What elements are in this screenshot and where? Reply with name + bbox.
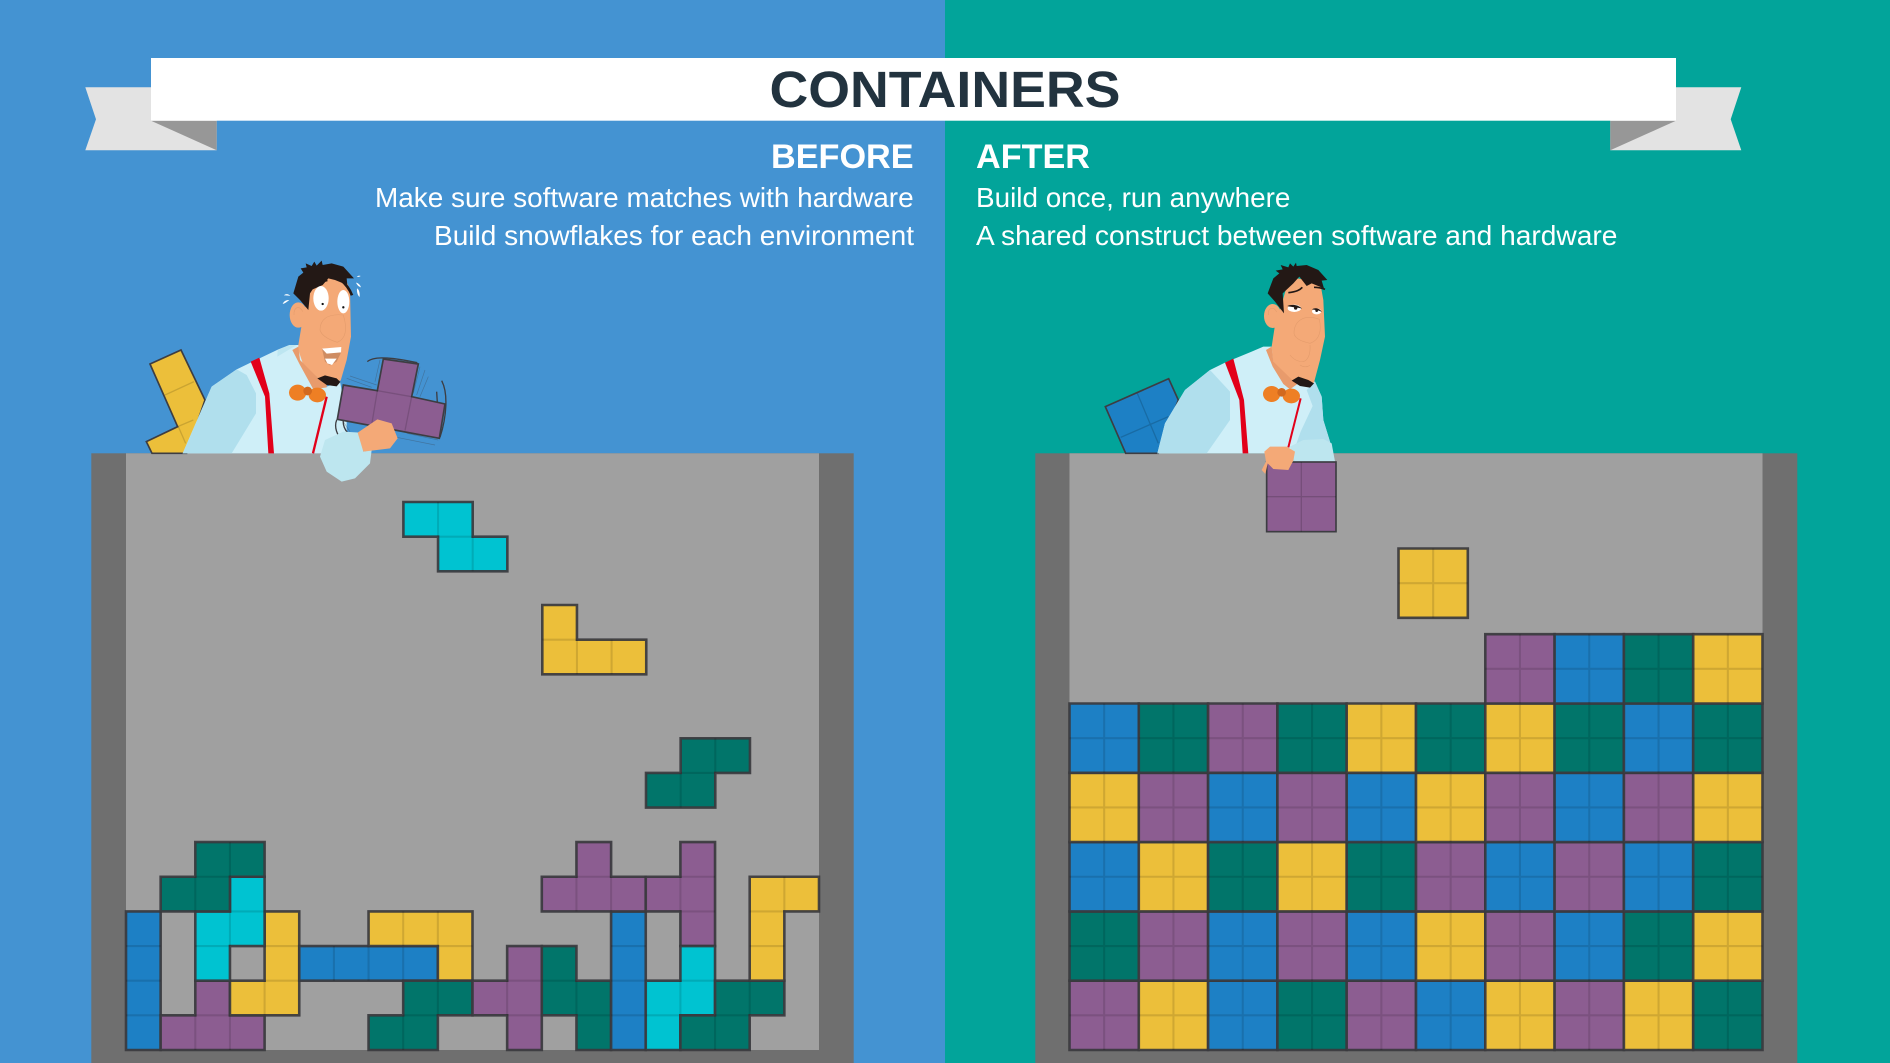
falling piece: yellow L: [542, 605, 646, 674]
piece: yellow L right: [750, 877, 819, 981]
heading: before: BEFORE: [771, 138, 914, 176]
falling piece: cyan Z: [403, 502, 507, 571]
face and neck: [1272, 278, 1325, 385]
piece: purple T top: [542, 842, 646, 911]
piece: yellow J: [230, 911, 299, 1015]
bow tie: [1263, 386, 1300, 403]
neck shadow: [292, 347, 327, 389]
before line 2: Build snowflakes for each environment: [434, 220, 914, 251]
piece: blue I right: [611, 911, 646, 1050]
after container: [1035, 453, 1797, 1063]
yellow block behind shoulder: [146, 350, 205, 453]
piece: blue I left: [126, 911, 161, 1050]
purple square held by hand: [1267, 462, 1336, 532]
piece: yellow L horizontal: [369, 911, 472, 981]
purple T block being shaken: [337, 359, 445, 438]
face and neck: [298, 273, 351, 382]
panel: before background: [0, 0, 945, 1063]
nose line: [320, 315, 346, 342]
shirt shadow: [183, 369, 256, 453]
ear: [290, 302, 307, 328]
piece: green vertical S: [542, 946, 611, 1050]
sweat drops: [283, 276, 361, 304]
before container: [91, 453, 854, 1063]
right eye: [1312, 308, 1322, 314]
block row 6, partial: [1485, 634, 1762, 704]
character: relaxed man placing blocks: [1105, 263, 1336, 532]
piece: purple T: [161, 981, 265, 1050]
block row 5: [1070, 704, 1762, 773]
piece: blue I horizontal: [299, 946, 438, 981]
character: panicked man juggling blocks: [146, 261, 446, 482]
piece: purple T side: [646, 842, 715, 946]
container walls: [91, 453, 854, 1063]
piece: green S right: [680, 981, 784, 1050]
collar shadow: [277, 345, 297, 357]
shirt shadow right: [1290, 382, 1334, 462]
piece: green S low: [369, 981, 472, 1050]
nose and mouth lines: [1290, 317, 1320, 367]
brows: [1288, 287, 1325, 293]
ribbon right fold: [1610, 121, 1676, 150]
hair: [293, 261, 354, 310]
left eyebrow: [308, 280, 327, 292]
goatee: [1292, 377, 1314, 388]
settled tetris pieces, before: [126, 842, 819, 1050]
block row 3: [1070, 842, 1762, 911]
left suspender: [1225, 359, 1248, 453]
hair: [1268, 263, 1327, 313]
piece: cyan S: [195, 877, 265, 981]
left eye: [313, 286, 329, 311]
before line 1: Make sure software matches with hardware: [375, 182, 914, 213]
heading: after: AFTER: [976, 138, 1090, 176]
sleeve: [1290, 439, 1335, 462]
after text block: [976, 138, 1617, 251]
blue block behind shoulder: [1105, 379, 1178, 453]
before text block: [375, 138, 914, 251]
after line 1: Build once, run anywhere: [976, 182, 1290, 213]
shirt shadow left: [1157, 370, 1230, 453]
fist: [358, 419, 398, 452]
shirt: [183, 345, 347, 453]
block row 4: [1070, 773, 1762, 842]
container walls: [1035, 453, 1797, 1063]
right suspender: [313, 397, 327, 453]
block row 2: [1070, 911, 1762, 981]
right eyebrow: [340, 279, 352, 295]
shaking arcs: [336, 358, 446, 441]
goatee: [317, 375, 340, 386]
neck shadow: [1266, 347, 1297, 389]
title ribbon: [85, 58, 1741, 150]
left eye: [1287, 305, 1302, 312]
container interior: [126, 453, 819, 1050]
title: CONTAINERS: [770, 61, 1120, 118]
panel: after background: [945, 0, 1890, 1063]
after line 2: A shared construct between software and hardware: [976, 220, 1617, 251]
piece: cyan S right: [646, 946, 715, 1050]
right suspender: [1288, 398, 1301, 447]
shirt: [1157, 347, 1335, 462]
falling piece: green S: [646, 738, 750, 808]
mouth: [322, 347, 341, 365]
ribbon left fold: [151, 121, 217, 150]
ribbon left tail: [85, 87, 217, 150]
ribbon right tail: [1610, 87, 1741, 150]
stacked blocks, after: [1070, 634, 1762, 1050]
bow tie: [289, 385, 326, 402]
piece: purple vertical T: [472, 946, 542, 1050]
piece: green Z top: [161, 842, 265, 911]
container interior: [1070, 453, 1762, 1050]
motion blur lines: [343, 358, 438, 445]
block row 1: [1070, 981, 1762, 1050]
left suspender: [251, 358, 274, 453]
ear: [1264, 304, 1281, 328]
right eye: [337, 290, 349, 313]
hand: [1262, 447, 1295, 474]
ribbon white band: [151, 58, 1676, 121]
falling piece: yellow square: [1398, 548, 1468, 618]
sleeve cuff: [320, 432, 372, 482]
